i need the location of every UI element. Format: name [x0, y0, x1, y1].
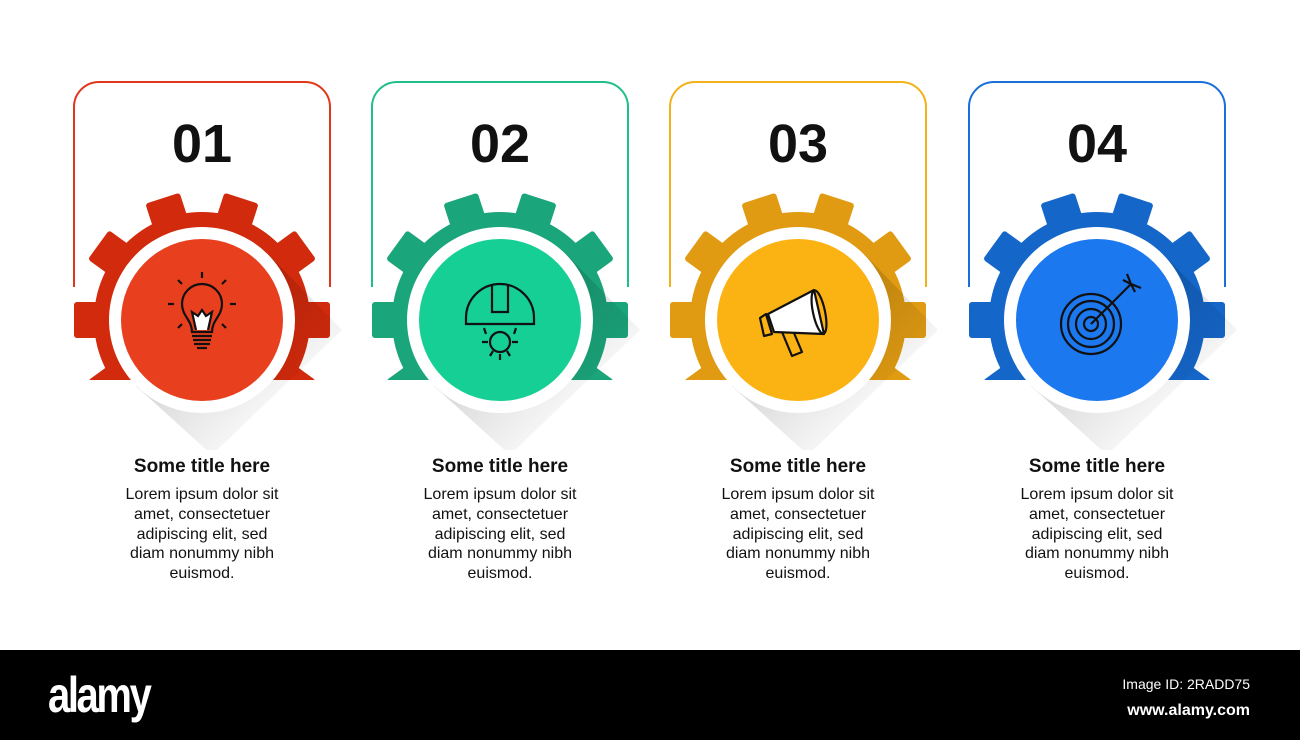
step 1 graphic: [74, 82, 342, 455]
footer bar: [0, 650, 1300, 740]
step 2 graphic: [372, 82, 640, 455]
text block 4: amet, consectetuer: [1029, 506, 1165, 523]
step 2 graphic: 02: [470, 114, 530, 174]
text block 1: adipiscing elit, sed: [137, 526, 267, 543]
footer bar: www.alamy.com: [1127, 702, 1250, 719]
text block 2: Lorem ipsum dolor sit: [424, 486, 576, 503]
text block 3: Some title here: [730, 456, 866, 477]
text block 1: euismod.: [170, 565, 234, 582]
text block 2: Some title here: [432, 456, 568, 477]
text block 3: amet, consectetuer: [730, 506, 866, 523]
text block 4: Lorem ipsum dolor sit: [1021, 486, 1173, 503]
icon: light bulb: [168, 272, 236, 348]
icon: target with arrow: [1061, 274, 1141, 354]
step 3 graphic: [670, 82, 938, 455]
text block 4: Some title here: [1029, 456, 1165, 477]
text block 2: euismod.: [468, 565, 532, 582]
step 1 graphic: 01: [172, 114, 232, 174]
text block 2: adipiscing elit, sed: [435, 526, 565, 543]
text block 1: Some title here: [134, 456, 270, 477]
step 3 graphic: 03: [768, 114, 828, 174]
footer bar: alamy: [48, 667, 149, 723]
text block 4: euismod.: [1065, 565, 1129, 582]
text block 3: adipiscing elit, sed: [733, 526, 863, 543]
text block 4: adipiscing elit, sed: [1032, 526, 1162, 543]
text block 2: diam nonummy nibh: [428, 545, 572, 562]
icon: helmet with gear: [466, 284, 534, 360]
infographic graphics: [73, 81, 1236, 450]
text block 3: diam nonummy nibh: [726, 545, 870, 562]
text block 2: amet, consectetuer: [432, 506, 568, 523]
footer bar: Image ID: 2RADD75: [1122, 676, 1250, 692]
text block 3: Lorem ipsum dolor sit: [722, 486, 874, 503]
step 4 graphic: 04: [1067, 114, 1127, 174]
text block 4: [1021, 456, 1174, 582]
text block 2: [424, 456, 576, 582]
text block 1: [126, 456, 278, 582]
text block 1: amet, consectetuer: [134, 506, 270, 523]
step 4 graphic: [969, 82, 1237, 455]
icon: megaphone: [760, 289, 829, 356]
text block 1: diam nonummy nibh: [130, 545, 274, 562]
text block 1: Lorem ipsum dolor sit: [126, 486, 278, 503]
text block 3: euismod.: [766, 565, 830, 582]
text block 4: diam nonummy nibh: [1025, 545, 1169, 562]
text block 3: [722, 456, 874, 582]
